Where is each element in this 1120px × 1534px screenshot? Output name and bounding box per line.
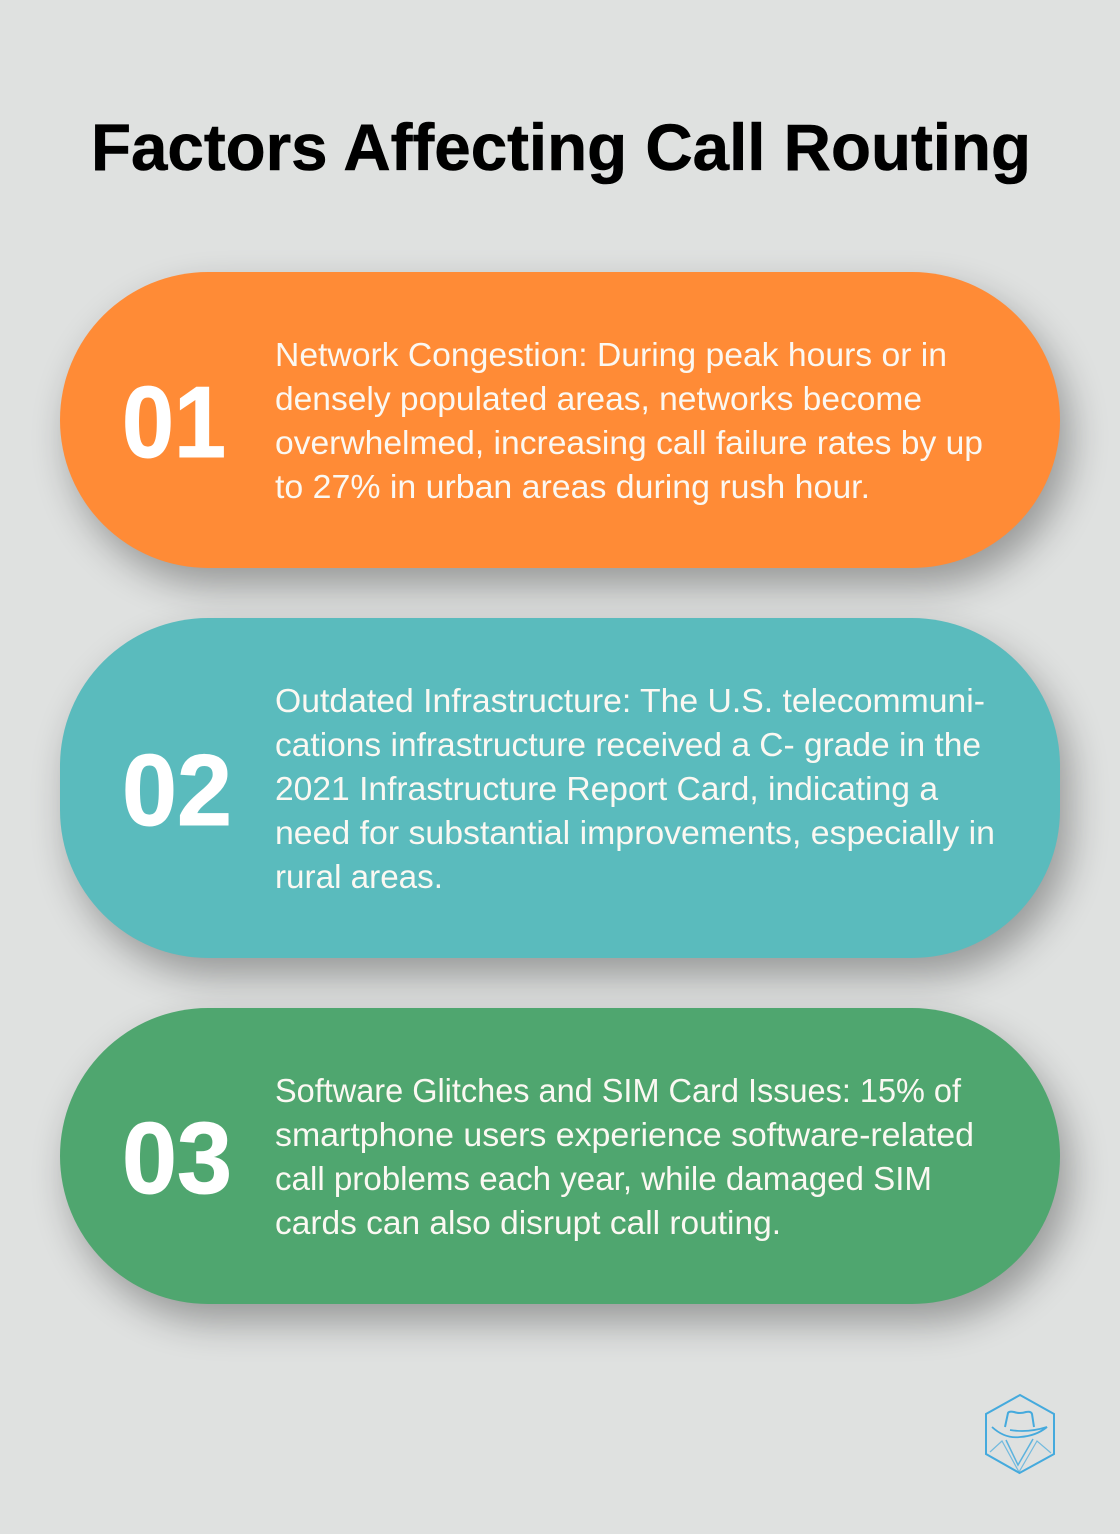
number 02: 02 [122, 735, 232, 847]
text: software glitches: Software Glitches and SIM Card Issues: 15% of [275, 1072, 962, 1109]
number 01: 01 [122, 367, 226, 479]
text: network congestion [275, 336, 983, 505]
text: outdated infrastructure: rural areas. [275, 858, 443, 895]
text: outdated infrastructure: Outdated Infrastructure: The U.S. telecommuni- [275, 682, 985, 719]
icon: spy logo [985, 1394, 1055, 1474]
text: network congestion: densely populated areas, networks become [275, 380, 922, 417]
text: outdated infrastructure: cations infrastructure received a C- grade in the [275, 726, 981, 763]
text: network congestion: to 27% in urban areas during rush hour. [275, 468, 870, 505]
text: outdated infrastructure [275, 682, 995, 895]
text: software glitches [275, 1072, 974, 1241]
number 03: 03 [122, 1103, 232, 1215]
text: network congestion: Network Congestion: During peak hours or in [275, 336, 947, 373]
panel: network congestion [60, 272, 1060, 568]
panel: software glitches and SIM card issues [60, 1008, 1060, 1304]
text: network congestion: overwhelmed, increasing call failure rates by up [275, 424, 983, 461]
panel: outdated infrastructure [60, 618, 1060, 958]
text: outdated infrastructure: need for substantial improvements, especially in [275, 814, 995, 851]
text: outdated infrastructure: 2021 Infrastructure Report Card, indicating a [275, 770, 939, 807]
title: Factors Affecting Call Routing [91, 110, 1031, 184]
text: software glitches: call problems each year, while damaged SIM [275, 1160, 932, 1197]
text: software glitches: smartphone users experience software-related [275, 1116, 974, 1153]
text: software glitches: cards can also disrupt call routing. [275, 1204, 781, 1241]
